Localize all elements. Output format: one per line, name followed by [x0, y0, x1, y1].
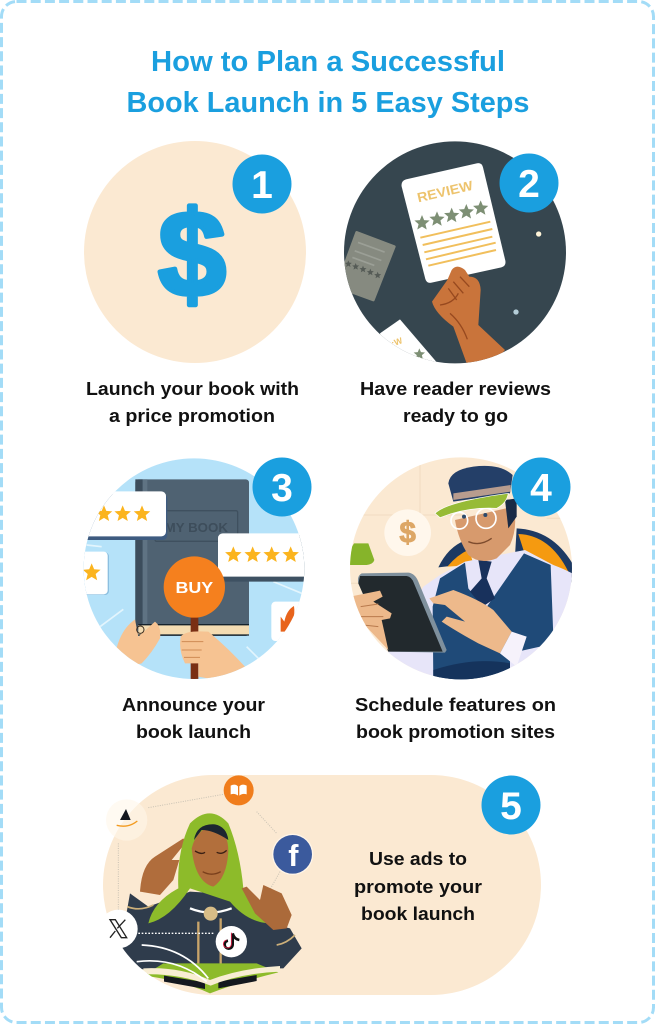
badge 2 [500, 154, 558, 212]
step 5 caption: Use ads to [369, 848, 467, 869]
one star card [84, 552, 109, 595]
left hand [115, 619, 160, 667]
step 5 caption [354, 848, 482, 924]
step 1 illustration: dollar sign [84, 141, 306, 363]
review sheet: REVIEW [416, 178, 475, 205]
badge 3: 3 [271, 467, 293, 510]
buy paddle [164, 556, 225, 683]
badge 5 [482, 776, 540, 834]
tiktok icon [216, 926, 247, 957]
step 5 pill panel [103, 775, 541, 995]
badge 4: 4 [530, 467, 552, 510]
right hand [242, 885, 292, 930]
step 5 caption: book launch [361, 903, 475, 924]
left hand [140, 838, 186, 895]
badge 2: 2 [518, 163, 540, 206]
dotted network [118, 794, 280, 910]
right hand [429, 590, 527, 667]
chair [438, 528, 573, 583]
title: Book Launch in 5 Easy Steps [126, 87, 530, 119]
badge 1: 1 [251, 164, 273, 207]
step 2 caption: ready to go [403, 405, 508, 426]
step 3 caption: Announce your [122, 694, 265, 715]
cap [435, 466, 513, 518]
dollar bubble [384, 509, 431, 556]
three star card [88, 491, 168, 540]
cloak body [122, 892, 302, 970]
flame card [271, 602, 300, 641]
badge 5: 5 [500, 785, 522, 828]
book: MY BOOK [165, 521, 229, 535]
step 4 caption: book promotion sites [356, 721, 555, 742]
badge 4 [512, 458, 570, 516]
badge 3 [252, 458, 312, 516]
buy paddle: BUY [175, 580, 214, 597]
step 2 illustration: hand holding review [344, 141, 566, 364]
step 2 caption: Have reader reviews [360, 378, 551, 399]
step 4 illustration: man with tablet [350, 457, 572, 680]
faded review card [337, 232, 394, 300]
specks [513, 231, 541, 315]
facebook icon [272, 834, 313, 875]
review sheet [402, 163, 505, 283]
title: How to Plan a Successful [151, 46, 505, 78]
four star card [218, 533, 304, 582]
lower review card [380, 319, 436, 362]
step 4 caption [355, 694, 556, 742]
head [451, 498, 517, 561]
step 5 illustration: mage with social icons [99, 775, 313, 993]
right hand [180, 631, 245, 680]
open book [137, 933, 280, 993]
step 3 caption: book launch [136, 721, 251, 742]
step 3 caption [122, 694, 265, 742]
book icon [224, 775, 254, 805]
step 1 illustration: dollar sign: $ [158, 186, 226, 322]
book [135, 479, 249, 636]
tablet [358, 573, 447, 653]
lower review card: :W [390, 335, 405, 349]
hood [148, 813, 268, 923]
facebook icon: f [288, 839, 299, 873]
step 3 illustration: book announcement [84, 458, 304, 679]
step 5 caption: promote your [354, 876, 482, 897]
badge 1 [232, 154, 292, 214]
x icon [99, 910, 138, 948]
step 2 caption [360, 378, 551, 426]
left hand [350, 591, 392, 650]
torso [388, 550, 580, 683]
hand [432, 267, 505, 370]
title [126, 46, 530, 119]
step 1 caption: a price promotion [109, 405, 275, 426]
step 1 caption [86, 378, 299, 426]
step 4 caption: Schedule features on [355, 694, 556, 715]
flask [350, 543, 374, 565]
collar clasp [190, 906, 232, 964]
step 1 caption: Launch your book with [86, 378, 299, 399]
amazon icon [106, 799, 147, 841]
dollar bubble: $ [400, 517, 416, 550]
